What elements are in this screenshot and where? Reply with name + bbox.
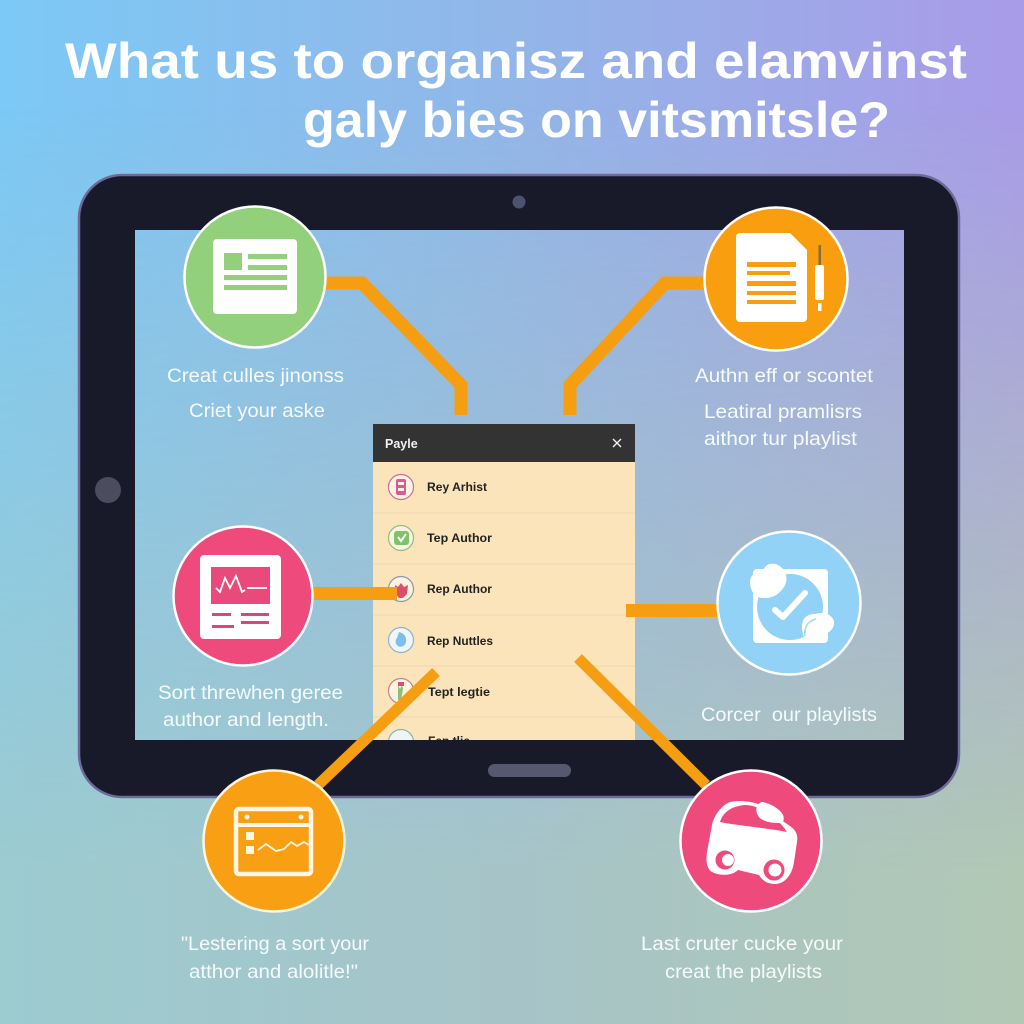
step: middle left: [158, 526, 343, 731]
title: galy bies on vitsmitsle?: [303, 92, 890, 148]
icon: cart: [707, 801, 797, 884]
caption: Creat culles jinonss: [167, 365, 344, 387]
icon: browser chart: [236, 809, 311, 874]
caption: author and length.: [163, 709, 329, 731]
caption: [181, 933, 370, 983]
icon: document and pen: [736, 233, 824, 322]
caption: Sort threwhen geree: [158, 682, 343, 704]
row 3: Rep Author: [427, 582, 492, 596]
step: top right: [695, 208, 874, 450]
row 6: [388, 728, 470, 740]
title: [65, 33, 967, 148]
row 1: [388, 474, 487, 500]
row 2: Tep Author: [427, 531, 492, 545]
caption: Leatiral pramlisrs: [704, 401, 862, 423]
caption: atthor and alolitle!": [189, 961, 358, 983]
connector: bottom left: [318, 672, 436, 785]
row 2: [388, 526, 492, 550]
connector: top right: [570, 283, 705, 415]
caption: [167, 365, 344, 422]
caption: [158, 682, 343, 731]
caption: Last cruter cucke your: [641, 933, 844, 955]
home bar: [488, 764, 571, 777]
icon: article: [213, 239, 297, 314]
side button: [95, 477, 121, 503]
step: middle right: [701, 532, 877, 726]
connector: top left: [325, 283, 461, 415]
caption: "Lestering a sort your: [181, 933, 370, 955]
step: bottom left: [181, 770, 370, 983]
row 5: Tept legtie: [428, 685, 490, 699]
camera: [512, 196, 526, 208]
close icon: [613, 439, 621, 447]
caption: aithor tur playlist: [704, 428, 858, 450]
row 5: [388, 678, 490, 704]
row 4: Rep Nuttles: [427, 634, 493, 648]
caption: creat the playlists: [665, 961, 822, 983]
icon: check badge: [750, 564, 834, 643]
title: What us to organisz and elamvinst: [65, 33, 967, 89]
step: bottom right: [641, 770, 844, 983]
panel: playlist window: [373, 424, 635, 754]
connector: bottom right: [578, 658, 706, 785]
caption: Corcer our playlists: [701, 704, 877, 726]
caption: [641, 933, 844, 983]
window title: Payle: [385, 437, 418, 451]
caption: [695, 365, 874, 450]
row 3: [388, 576, 492, 602]
row 6: Fep tlie: [428, 734, 470, 748]
icon: report with pulse: [200, 555, 281, 639]
connector: middle right: [626, 604, 718, 617]
row 1: Rey Arhist: [427, 480, 487, 494]
row 4: [388, 628, 493, 652]
caption: Authn eff or scontet: [695, 365, 874, 387]
caption: Criet your aske: [189, 400, 325, 422]
connector: middle left: [313, 587, 397, 600]
step: top left: [167, 206, 344, 422]
tablet frame: [79, 175, 959, 797]
